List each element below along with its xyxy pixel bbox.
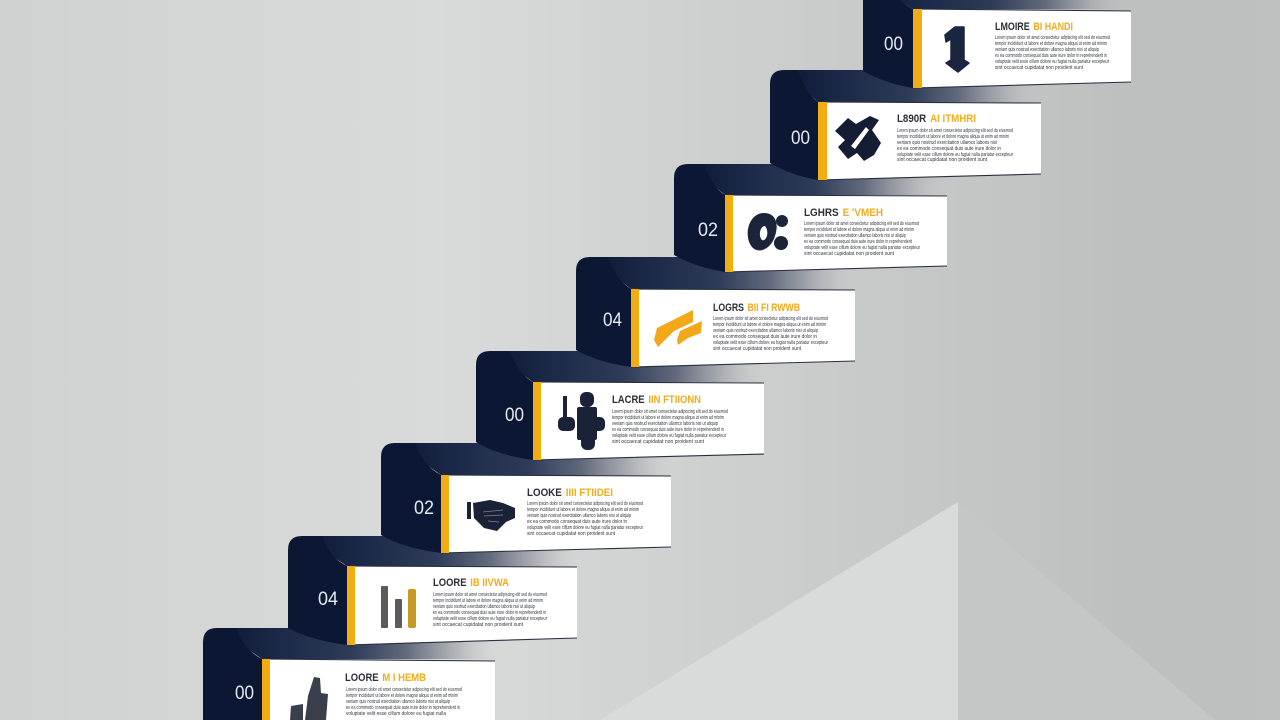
title: L890R AI ITMHRI (897, 109, 976, 126)
number: 04 (603, 310, 622, 331)
body text: Lorem ipsum dolor sit amet consectetur adipiscing elit sed do eiusmod (612, 409, 728, 415)
body text: Lorem ipsum dolor sit amet consectetur adipiscing elit sed do eiusmod (804, 221, 919, 227)
number: 00 (884, 34, 903, 55)
accent bar (533, 382, 541, 460)
body text: ex ea commodo consequat duis aute irure dolor in (527, 519, 627, 525)
body text: sint occaecat cupidatat non proident sunt (804, 251, 895, 257)
step 3 (674, 164, 947, 272)
body text: tempor incididunt ut labore et dolore magna aliqua ut enim ad minim (346, 693, 458, 699)
title: LGHRS E 'VMEH (804, 203, 883, 220)
body text (527, 501, 643, 537)
title: LACRE IIN FTIIONN (612, 390, 701, 407)
title: LOORE IB IIVWA (433, 573, 509, 590)
top face (863, 0, 1131, 9)
side block (381, 443, 441, 553)
body text: veniam quis nostrud exercitation ullamco laboris nisi ut aliquip (612, 421, 718, 427)
accent bar (913, 9, 922, 88)
title: LOOKE IIII FTIIDEI (527, 483, 613, 500)
body text: tempor incididunt ut labore et dolore magna aliqua ut enim ad minim (713, 322, 826, 328)
body text: voluptate velit esse cillum dolore eu fugiat nulla pariatur excepteur (527, 525, 643, 531)
body text: voluptate velit esse cillum dolore eu fugiat nulla pariatur excepteur (713, 340, 828, 346)
card shadow edges (913, 9, 1131, 88)
body text: Lorem ipsum dolor sit amet consectetur adipiscing elit sed do eiusmod (995, 35, 1110, 41)
card shadow edges (725, 195, 947, 272)
card shadow edges (631, 289, 855, 367)
body text: ex ea commodo consequat duis aute irure dolor in reprehenderit in (612, 427, 724, 433)
step 5 (476, 351, 764, 460)
body text: voluptate velit esse cillum dolore eu fugiat nulla pariatur excepteur (612, 433, 726, 439)
title: LOGRS BII FI RWWB (713, 298, 800, 315)
card (913, 9, 1131, 88)
step 1 (863, 0, 1131, 88)
side block (863, 0, 913, 88)
card (818, 102, 1041, 180)
number: 04 (318, 589, 338, 610)
body text: veniam quis nostrud exercitation ullamco laboris nisi ut aliquip (433, 604, 535, 610)
step 8 (203, 628, 495, 720)
body text: Lorem ipsum dolor sit amet consectetur adipiscing elit sed do eiusmod (346, 687, 462, 693)
card shadow edges (533, 382, 764, 460)
body text (897, 128, 1013, 163)
number: 00 (791, 128, 810, 149)
icon: orange arrows (654, 310, 702, 347)
number: 02 (414, 498, 434, 519)
body text: tempor incididunt ut labore et dolore magna aliqua ut enim ad minim (897, 134, 1009, 140)
title: LOORE M I HEMB (345, 668, 426, 685)
top face (590, 257, 855, 289)
number: 02 (698, 220, 718, 241)
step 7 (288, 536, 577, 645)
title: LMOIRE BI HANDI (995, 17, 1073, 34)
side block (203, 628, 262, 720)
body text: Lorem ipsum dolor sit amet consectetur adipiscing elit sed do eiusmod (897, 128, 1013, 134)
card (441, 475, 671, 553)
card (347, 566, 577, 645)
body text: Lorem ipsum dolor sit amet consectetur adipiscing elit sed do eiusmod (433, 592, 547, 598)
accent bar (347, 566, 355, 645)
body text (346, 687, 462, 717)
body text: voluptate velit esse cillum dolore eu fugiat nulla pariatur excepteur (433, 616, 547, 622)
side block (770, 70, 818, 180)
icon: tools (835, 116, 881, 161)
body text: sint occaecat cupidatat non proident sunt (527, 531, 616, 537)
accent bar (262, 659, 270, 720)
body text: veniam quis nostrud exercitation ullamco laboris nisi (897, 140, 997, 146)
card (262, 659, 495, 720)
body text (804, 221, 920, 257)
card shadow edges (347, 566, 577, 645)
body text: veniam quis nostrud exercitation ullamco laboris nisi ut aliquip (804, 233, 906, 239)
body text: tempor incididunt ut labore et dolore magna aliqua ut enim ad minim (433, 598, 543, 604)
top face (784, 70, 1041, 102)
top face (302, 536, 577, 566)
body text: veniam quis nostrud exercitation ullamco laboris nisi ut aliquip (713, 328, 818, 334)
body text: ex ea commodo consequat duis aute irure dolor in (897, 146, 1001, 152)
body text: ex ea commodo consequat duis aute irure dolor in reprehenderit in (433, 610, 546, 616)
step 2 (770, 70, 1041, 180)
top face (688, 164, 947, 195)
top face (217, 628, 495, 659)
side block (476, 351, 533, 460)
body text: veniam quis nostrud exercitation ullamco laboris nisi ut aliquip (995, 47, 1099, 53)
icon: thumbs up (290, 677, 328, 720)
card (725, 195, 947, 272)
body text: tempor incididunt ut labore et dolore magna aliqua ut enim ad minim (527, 507, 639, 513)
card top edge (262, 659, 495, 661)
top face (395, 443, 671, 475)
body text: Lorem ipsum dolor sit amet consectetur adipiscing elit sed do eiusmod (713, 316, 828, 322)
body text: sint occaecat cupidatat non proident sunt (713, 346, 802, 352)
body text: tempor incididunt ut labore et dolore magna aliqua ut enim ad minim (804, 227, 914, 233)
icon: handshake (467, 500, 515, 531)
icon: numeral one (945, 27, 969, 72)
side block (674, 164, 725, 272)
number: 00 (505, 405, 524, 426)
body text: tempor incididunt ut labore et dolore magna aliqua ut enim ad minim (612, 415, 724, 421)
body text: ex ea commodo consequat duis aute irure dolor in (713, 334, 817, 340)
card shadow edges (818, 102, 1041, 180)
step 6 (381, 443, 671, 553)
body text: voluptate velit esse cillum dolore eu fugiat nulla pariatur excepteur (804, 245, 920, 251)
side block (288, 536, 347, 645)
body text: veniam quis nostrud exercitation ullamco laboris nisi ut aliquip (527, 513, 631, 519)
body text: Lorem ipsum dolor sit amet consectetur adipiscing elit sed do eiusmod (527, 501, 643, 507)
icon: robot figure (558, 392, 605, 450)
body text: voluptate velit esse cillum dolore eu fugiat nulla pariatur excepteur (995, 59, 1109, 65)
card (533, 382, 764, 460)
step 4 (576, 257, 855, 367)
number: 00 (235, 683, 254, 704)
card shadow edges (441, 475, 671, 553)
body text (433, 592, 547, 628)
body text: tempor incididunt ut labore et dolore magna aliqua ut enim ad minim (995, 41, 1107, 47)
icon: ring and dots (748, 213, 788, 250)
body text: sint occaecat cupidatat non proident sunt (612, 439, 705, 445)
body text (713, 316, 828, 352)
accent bar (725, 195, 733, 272)
body text: sint occaecat cupidatat non proident sunt (433, 622, 524, 628)
body text: ex ea commodo consequat duis aute irure dolor in reprehenderit in (346, 705, 460, 711)
body text: voluptate velit esse cillum dolore eu fugiat nulla (346, 711, 446, 717)
top face (490, 351, 764, 382)
body text: ex ea commodo consequat duis aute irure dolor in reprehenderit in (995, 53, 1107, 59)
card (631, 289, 855, 367)
side block (576, 257, 631, 367)
body text: sint occaecat cupidatat non proident sunt (897, 157, 988, 163)
accent bar (631, 289, 639, 367)
accent bar (441, 475, 449, 553)
icon: bars (381, 586, 416, 628)
accent bar (818, 102, 827, 180)
body text: sint occaecat cupidatat non proident sunt (995, 65, 1084, 71)
body text: voluptate velit esse cillum dolore eu fugiat nulla pariatur excepteur (897, 152, 1013, 158)
body text: veniam quis nostrud exercitation ullamco laboris nisi ut aliquip (346, 699, 450, 705)
body text: ex ea commodo consequat duis aute irure dolor in reprehenderit (804, 239, 912, 245)
body text (995, 35, 1110, 71)
body text (612, 409, 728, 445)
